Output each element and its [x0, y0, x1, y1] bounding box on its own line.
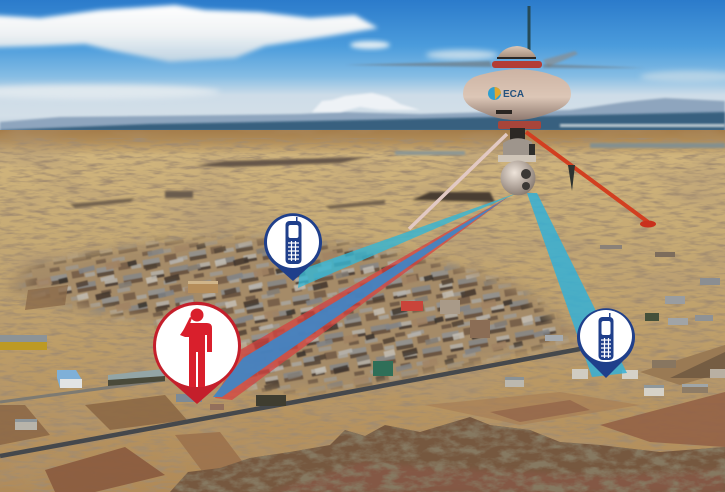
ground texture — [0, 138, 725, 492]
drone: white tripod leg — [409, 134, 507, 229]
beam: blue person link — [213, 197, 508, 397]
far plain features — [70, 143, 725, 209]
icon: phone — [598, 313, 614, 360]
icon: phone — [286, 217, 302, 264]
drone: upper rotor hub — [492, 57, 542, 68]
sky — [0, 0, 725, 132]
drone: red leg small antenna — [568, 165, 575, 191]
village accent buildings — [188, 281, 563, 376]
drone: red tripod leg — [526, 132, 648, 222]
drone: lower rotor ring — [498, 121, 541, 129]
pin: phone right — [577, 308, 635, 378]
drone: top dome — [498, 46, 536, 57]
drone: red leg foot — [640, 220, 656, 228]
village — [0, 225, 720, 400]
ground mottling — [0, 130, 725, 492]
icon: person on phone — [180, 308, 212, 387]
clouds — [0, 5, 725, 99]
drone: ECA logo — [488, 87, 524, 100]
drone — [345, 6, 656, 229]
drone: gimbal mount — [498, 128, 536, 162]
foreground rocky hill — [170, 415, 725, 492]
drone: vent — [496, 110, 512, 114]
beam: teal to upper phone — [298, 192, 520, 288]
drone: rotor blurred blades — [345, 51, 645, 68]
foreground fields — [0, 285, 725, 492]
outlying houses — [600, 245, 720, 325]
distant mountains — [0, 93, 725, 132]
ground plateau — [0, 130, 725, 492]
roads — [0, 349, 580, 456]
beam: red person zone — [215, 197, 508, 400]
pin: phone upper — [264, 213, 322, 281]
roadside buildings — [0, 335, 725, 430]
drone: ECA logo: ECA — [503, 89, 524, 100]
drone: main body — [463, 69, 571, 120]
drone: antenna — [528, 6, 530, 50]
signal beams — [213, 192, 627, 400]
pin: person — [153, 302, 241, 404]
drone: camera ball — [500, 160, 536, 196]
beam: teal to right phone — [527, 193, 627, 377]
